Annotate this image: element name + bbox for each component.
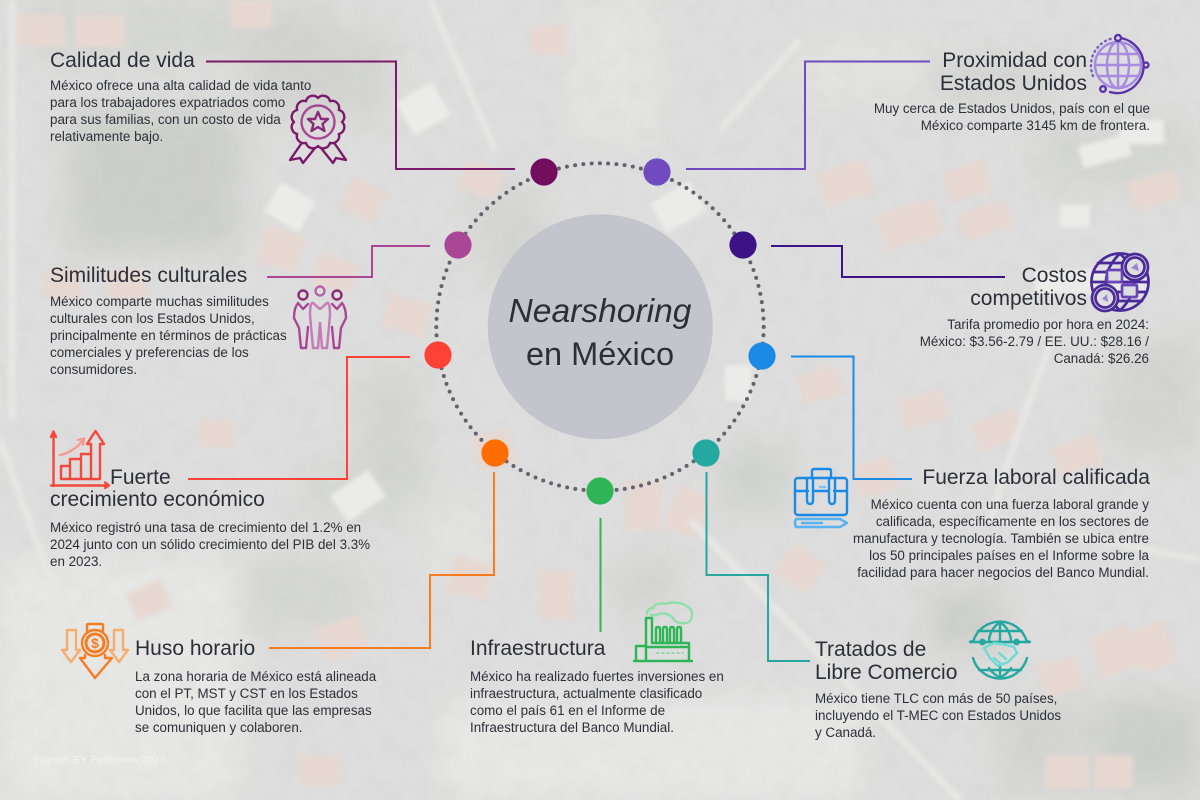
heading [940, 49, 1087, 94]
text [853, 496, 1149, 580]
text: México ofrece una alta calidad de vida tanto [50, 78, 311, 92]
node: tratados [692, 439, 720, 467]
text: México ha realizado fuertes inversiones en [470, 668, 724, 684]
node: costos [729, 231, 757, 259]
text: 2024 junto con un sólido crecimiento del PIB del 3.3% [50, 536, 370, 552]
connector: costos [771, 246, 1005, 277]
icon: globe with chat bubbles [1090, 252, 1150, 312]
node: crecimiento [424, 341, 452, 369]
text: Infraestructura del Banco Mundial. [470, 720, 674, 734]
text: México tiene TLC con más de 50 países, [815, 690, 1057, 706]
icon: money clock with down arrows: $ [91, 635, 99, 651]
connector: huso horario [269, 472, 494, 648]
connector: infraestructura [600, 518, 602, 632]
panel: costos competitivos [920, 252, 1150, 366]
text: manufactura y tecnología. También se ubica entre [853, 530, 1149, 546]
text: calificada, específicamente en los sectores de [876, 514, 1149, 528]
text [135, 668, 376, 735]
heading: Costos [1022, 264, 1087, 287]
icon: money clock with down arrows [60, 622, 130, 680]
text: principalmente en términos de prácticas [50, 328, 287, 342]
connector: similitudes [267, 246, 430, 277]
connector: fuerza laboral [791, 356, 912, 479]
heading: Similitudes culturales [50, 264, 247, 286]
icon: globe with orbit [1090, 34, 1150, 94]
heading: Tratados de [815, 638, 926, 661]
central circle [488, 214, 713, 439]
icon: growth chart [50, 430, 110, 490]
icon: award rosette [288, 94, 348, 164]
icon: globe with handshake [968, 620, 1032, 680]
text [50, 294, 287, 376]
connector: proximidad [686, 62, 930, 169]
heading: Estados Unidos [940, 72, 1087, 94]
node: huso horario [481, 439, 509, 467]
heading: Fuerza laboral calificada [922, 466, 1150, 489]
text: infraestructura, actualmente clasificado [470, 686, 702, 700]
heading: Proximidad con [942, 49, 1087, 72]
node: fuerza laboral [748, 342, 776, 370]
text: México comparte 3145 km de frontera. [921, 118, 1150, 132]
heading [815, 638, 957, 684]
text: Unidos, lo que facilita que las empresas [135, 702, 372, 718]
dotted ring [436, 163, 764, 491]
text: La zona horaria de México está alineada [135, 668, 376, 684]
node: infraestructura [586, 477, 614, 505]
connector: crecimiento [188, 357, 410, 479]
heading: Infraestructura [470, 637, 605, 660]
icon: briefcase and pen [794, 468, 848, 528]
text: como el país 61 en el Informe de [470, 702, 665, 718]
text: para sus familias, con un costo de vida [50, 112, 281, 126]
text: facilidad para hacer negocios del Banco Mundial. [857, 564, 1149, 580]
heading: Calidad de vida [50, 48, 195, 72]
text: consumidores. [50, 362, 137, 376]
heading: Libre Comercio [815, 660, 957, 684]
text: Tarifa promedio por hora en 2024: [947, 316, 1149, 332]
node: calidad de vida [530, 158, 558, 186]
text: Muy cerca de Estados Unidos, país con el que [874, 100, 1150, 116]
text [50, 520, 370, 568]
text: relativamente bajo. [50, 128, 163, 144]
text: culturales con los Estados Unidos, [50, 310, 255, 326]
connector: tratados [706, 472, 810, 661]
text: Canadá: $26.26 [1054, 350, 1149, 366]
connector: calidad de vida [206, 62, 515, 169]
node: similitudes [444, 231, 472, 259]
text [470, 668, 724, 734]
source note: Fuente: EY Parthenon 2023 [35, 754, 165, 766]
text: para los trabajadores expatriados como [50, 94, 285, 110]
text [50, 78, 311, 144]
text: México comparte muchas similitudes [50, 294, 269, 308]
heading: competitivos [970, 286, 1087, 310]
panel: huso horario [60, 622, 376, 735]
heading [970, 264, 1087, 310]
panel: calidad de vida [50, 48, 348, 164]
text: los 50 principales países en el Informe sobre la [869, 548, 1149, 562]
text [874, 100, 1150, 133]
icon: factory [632, 601, 694, 662]
panel: proximidad con Estados Unidos [874, 34, 1150, 133]
panel: fuerza laboral calificada [794, 466, 1150, 580]
text: México: $3.56-2.79 / EE. UU.: $28.16 / [920, 334, 1149, 348]
panel: tratados de libre comercio [815, 620, 1061, 740]
text [920, 316, 1149, 366]
text: México cuenta con una fuerza laboral grande y [871, 496, 1149, 512]
icon: three people [292, 285, 348, 350]
heading: crecimiento económico [50, 488, 265, 511]
central title: Nearshoring [509, 293, 691, 330]
text: en 2023. [50, 554, 102, 568]
heading: Fuerte [110, 466, 171, 489]
panel: similitudes culturales [50, 264, 348, 376]
text [815, 690, 1061, 740]
central title [509, 293, 692, 372]
panel: infraestructura [470, 601, 724, 734]
text: se comuniquen y colaboren. [135, 720, 302, 734]
heading: Huso horario [135, 637, 255, 660]
text: México registró una tasa de crecimiento del 1.2% en [50, 520, 361, 534]
text: y Canadá. [815, 724, 876, 740]
central title: en México [526, 336, 674, 372]
text: con el PT, MST y CST en los Estados [135, 686, 358, 700]
panel: fuerte crecimiento económico [50, 430, 370, 568]
heading [50, 466, 265, 511]
node: proximidad [643, 158, 671, 186]
text: incluyendo el T-MEC con Estados Unidos [815, 708, 1061, 722]
text: comerciales y preferencias de los [50, 344, 249, 360]
